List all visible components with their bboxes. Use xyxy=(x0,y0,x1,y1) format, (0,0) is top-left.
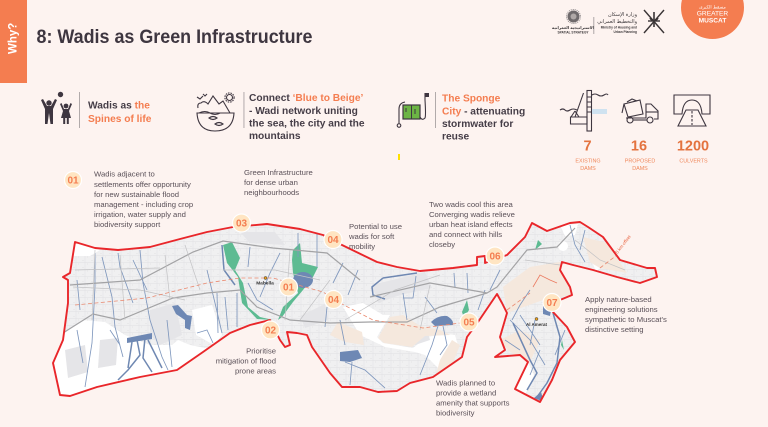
boundary: red study area outline xyxy=(53,222,657,402)
label: proposed dams: PROPOSED xyxy=(625,158,655,164)
callout 05: wetland amenity: biodiversity xyxy=(436,408,475,418)
label: existing dams: DAMS xyxy=(580,166,596,172)
text: blue to beige: Connect ‘Blue to Beige’ xyxy=(249,93,363,104)
icon: culvert xyxy=(674,95,710,126)
text: blue to beige: mountains xyxy=(249,131,301,142)
icon: people with ball xyxy=(41,92,72,124)
logo caption: ministry: والتخطيط العمراني xyxy=(597,19,638,25)
land: open white areas xyxy=(50,224,600,400)
stat: existing dams xyxy=(560,90,608,172)
wadis: thick trunk streams xyxy=(118,245,560,397)
callout 06: urban heat island: and connect with hills xyxy=(429,230,502,239)
badge 04 on map xyxy=(324,290,342,308)
map: wadi network of Greater Muscat xyxy=(50,220,670,405)
callout 01: settlements: biodiversity support xyxy=(94,220,161,229)
badge 01 on map xyxy=(280,278,298,296)
text: sponge city: City - attenuating xyxy=(442,106,525,118)
wadis: green corridors xyxy=(223,240,564,350)
callout 07: nature-based solutions: 07 xyxy=(546,298,558,309)
callout 05: wetland amenity: 05 xyxy=(463,318,475,328)
logo: spatial strategy emblem xyxy=(566,10,580,24)
offset line: dashed red xyxy=(75,255,617,328)
roads xyxy=(63,228,575,333)
text: sponge city: The Sponge xyxy=(442,94,501,104)
logo badge: Greater Muscat: مسقط الكبرى xyxy=(699,4,726,10)
callout 01: settlements: settlements offer opportunity xyxy=(94,180,191,189)
logo caption: spatial strategy: الاستراتيجية العمرانية xyxy=(552,25,595,30)
logo caption: spatial strategy: SPATIAL STRATEGY xyxy=(557,30,589,34)
side tab: Why?: Why? xyxy=(8,23,20,54)
stat: proposed dams xyxy=(622,99,658,172)
text: spines of life: Wadis as the xyxy=(88,100,150,112)
callout 03: dense neighbourhoods: for dense urban xyxy=(244,178,298,187)
minor roads xyxy=(73,240,625,330)
badge 04 on map: 04 xyxy=(328,295,339,306)
callout 02: flood prone areas xyxy=(216,321,280,376)
place: Mabella xyxy=(256,276,274,286)
callout 05: wetland amenity: Wadis planned to xyxy=(436,378,495,388)
label: km offset: 5 km offset xyxy=(614,234,632,255)
callout 01: settlements: irrigation, water supply and xyxy=(94,210,186,219)
callout 01: settlements xyxy=(64,170,193,229)
callout 02: flood prone areas: mitigation of flood xyxy=(216,356,276,366)
callout 07: nature-based solutions xyxy=(543,294,667,334)
callout 02: flood prone areas: Prioritise xyxy=(246,346,276,356)
small yellow marker xyxy=(398,154,400,160)
place: Al Amerat: Al Amerat xyxy=(526,322,548,327)
icon: mountains sea and fish xyxy=(197,93,234,131)
side tab: Why? xyxy=(0,0,27,83)
place: Mabella: Mabella xyxy=(256,280,274,286)
label: proposed dams: DAMS xyxy=(632,166,648,172)
callout 01: settlements: management - including crop xyxy=(94,200,193,209)
logos: spatial strategy and ministry xyxy=(552,10,664,34)
theme: blue to beige xyxy=(197,92,365,142)
logo badge: Greater Muscat: MUSCAT xyxy=(699,18,726,24)
number: 1200: 1200 xyxy=(677,138,709,154)
callout 04: soft mobility: 04 xyxy=(327,235,339,246)
logo badge: Greater Muscat: GREATER xyxy=(697,10,728,18)
wadis: blue stream network xyxy=(77,225,585,388)
logo badge: Greater Muscat xyxy=(681,0,744,39)
logo caption: ministry xyxy=(597,12,638,34)
callout 04: soft mobility: Potential to use xyxy=(349,222,402,231)
callout 07: nature-based solutions: sympathetic to Muscat's xyxy=(585,315,667,324)
callout 06: urban heat island xyxy=(429,200,515,265)
callout 07: nature-based solutions: Apply nature-based xyxy=(585,295,652,304)
callout 02: flood prone areas: 02 xyxy=(265,326,276,336)
text: spines of life: Spines of life xyxy=(88,114,152,125)
wadis: lakes and reservoirs xyxy=(127,272,553,402)
theme: sponge city xyxy=(397,92,525,142)
land: built-up grey blocks xyxy=(65,232,432,378)
callout 05: wetland amenity: amenity that supports xyxy=(436,398,510,408)
callout 05: wetland amenity: provide a wetland xyxy=(436,388,496,398)
land: beige uplands xyxy=(330,237,627,378)
callout 07: nature-based solutions: distinctive setting xyxy=(585,325,644,334)
badge 01 on map: 01 xyxy=(283,282,294,294)
callout 06: urban heat island: closeby xyxy=(429,240,455,249)
callout 04: soft mobility: wadis for soft xyxy=(348,232,395,241)
theme: spines of life xyxy=(41,92,152,128)
logo caption: spatial strategy xyxy=(552,25,595,34)
callout 01: settlements: for new sustainable flood xyxy=(94,190,179,199)
callout 02: flood prone areas: prone areas xyxy=(235,366,276,376)
logo: oman emblem xyxy=(644,10,664,33)
text: sponge city: stormwater for xyxy=(442,119,513,130)
callout 04: soft mobility xyxy=(324,222,402,251)
callout 03: dense neighbourhoods: 03 xyxy=(236,218,247,230)
logo caption: ministry: Ministry of Housing and xyxy=(601,26,637,30)
callout 03: dense neighbourhoods xyxy=(232,168,313,232)
callout 03: dense neighbourhoods: neighbourhoods xyxy=(244,188,299,197)
callout 03: dense neighbourhoods: Green Infrastructure xyxy=(244,168,313,177)
callout 04: soft mobility: mobility xyxy=(349,242,375,251)
callout 06: urban heat island: Two wadis cool this area xyxy=(429,200,513,209)
icon: dump truck xyxy=(622,99,658,123)
logo caption: ministry: وزارة الإسكان xyxy=(608,12,638,18)
callout 06: urban heat island: urban heat island effects xyxy=(429,220,513,229)
callout 07: nature-based solutions: engineering solutions xyxy=(585,305,658,314)
callout 06: urban heat island: Converging wadis relieve xyxy=(429,210,515,219)
text: blue to beige: - Wadi network uniting xyxy=(249,106,358,117)
place: Al Amerat xyxy=(526,318,548,327)
boundary: internal red trace xyxy=(533,275,557,287)
callout 01: settlements: Wadis adjacent to xyxy=(94,170,155,178)
icon: dam xyxy=(560,90,608,131)
label: culverts: CULVERTS xyxy=(679,158,708,164)
text: blue to beige: the sea, the city and the xyxy=(249,118,365,130)
title: 8: Wadis as Green Infrastructure xyxy=(36,26,313,48)
label: existing dams: EXISTING xyxy=(575,158,601,164)
callout 01: settlements: 01 xyxy=(67,176,79,186)
map base xyxy=(50,220,670,405)
number: 7: 7 xyxy=(583,138,592,154)
number: 16: 16 xyxy=(631,138,647,154)
stat: culverts xyxy=(674,95,710,164)
callout 05: wetland amenity xyxy=(436,313,510,418)
icon: map with route xyxy=(397,93,429,127)
text: sponge city: reuse xyxy=(442,132,470,142)
logo caption: ministry: Urban Planning xyxy=(613,30,637,34)
callout 06: urban heat island: 06 xyxy=(489,252,501,262)
